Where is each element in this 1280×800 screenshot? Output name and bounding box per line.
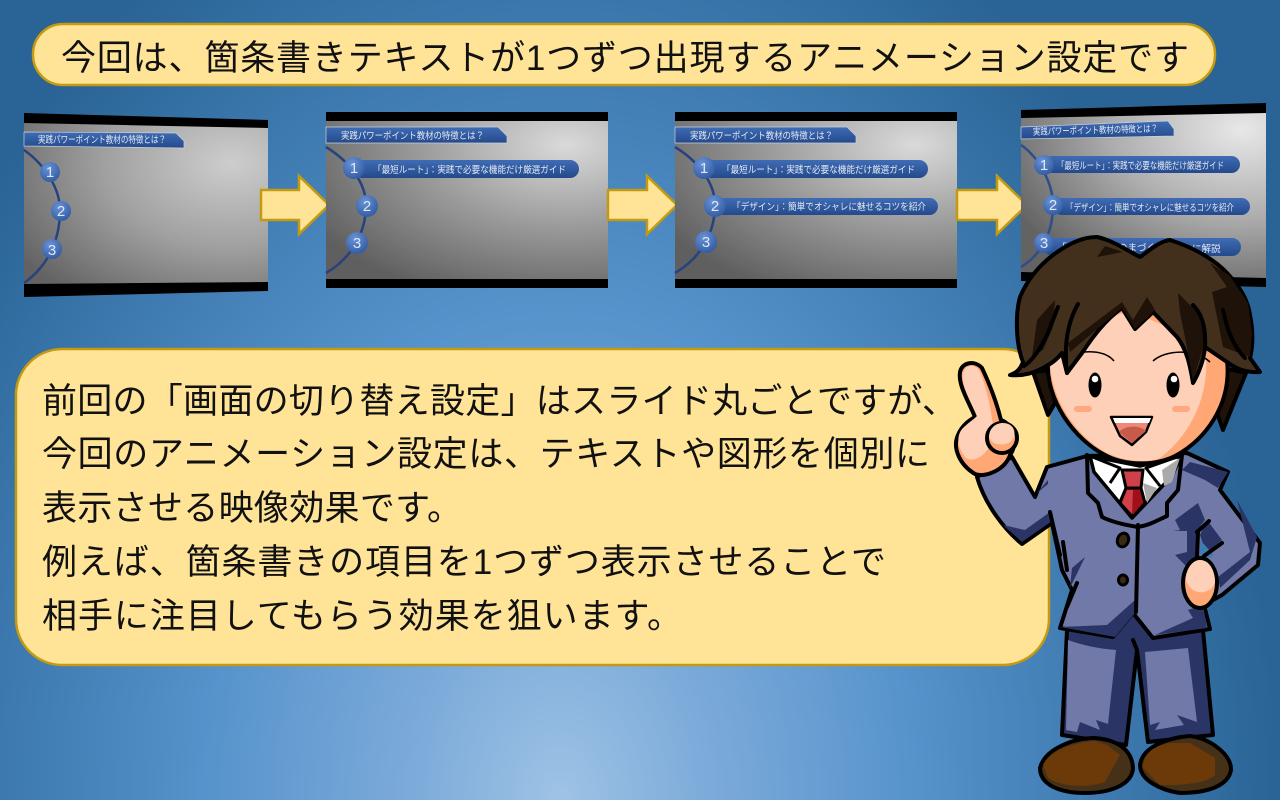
- slide 2: first bullet visible: 3: [353, 235, 361, 252]
- slide 4: three bullets visible, turning out: 「短: [1057, 242, 1076, 254]
- cheeks: [1074, 406, 1190, 412]
- slide 1: no bullets, turning in: 1: [46, 164, 54, 181]
- slide 3: two bullets visible: 3: [702, 234, 710, 251]
- slide 4: three bullets visible, turning out: 3: [1040, 235, 1048, 252]
- slide 2: first bullet visible: 「最短ルート」：実践で必要な機能だけ厳選ガイド: [373, 164, 566, 176]
- explanation text: 相手に注目してもらう効果を狙います。: [42, 597, 682, 636]
- hair: [1010, 237, 1260, 383]
- slide 2: first bullet visible: 実践パワーポイント教材の特徴とは？: [341, 130, 484, 142]
- shirt, collar and tie: [1087, 455, 1182, 527]
- slide 1: no bullets, turning in: 実践パワーポイント教材の特徴とは？: [38, 134, 166, 146]
- eyebrows: [1070, 352, 1210, 362]
- title banner: [33, 24, 1215, 85]
- left shoe: [1040, 738, 1133, 793]
- explanation text: 前回の「画面の切り替え設定」はスライド丸ごとですが、: [42, 382, 957, 421]
- hair strands: [1024, 304, 1245, 373]
- arrow 3: [957, 176, 1027, 234]
- explanation text: 表示させる映像効果です。: [42, 489, 462, 528]
- speech panel: [16, 349, 1049, 665]
- title banner: 今回は、箇条書きテキストが1つずつ出現するアニメーション設定です: [61, 39, 1189, 78]
- explanation text: 例えば、箇条書きの項目を1つずつ表示させることで: [42, 543, 886, 582]
- slide 4: three bullets visible, turning out: のまづくす: [1118, 243, 1166, 254]
- slide 2: first bullet visible: [326, 112, 608, 288]
- trousers: [1062, 605, 1213, 745]
- slide 1: no bullets, turning in: [24, 113, 268, 297]
- character: pointing businessman: [956, 237, 1260, 793]
- arrow 2: [608, 176, 677, 234]
- explanation text: [42, 382, 957, 636]
- back hair: [1033, 368, 1246, 430]
- pointing hand: [956, 363, 1017, 475]
- slide 4: three bullets visible, turning out: 「デザイン」：簡単でオシャレに魅せるコツを紹介: [1066, 202, 1234, 214]
- slide 4: three bullets visible, turning out: に解説: [1192, 243, 1221, 255]
- slide 1: no bullets, turning in: 3: [48, 242, 56, 259]
- slide 3: two bullets visible: 実践パワーポイント教材の特徴とは？: [690, 130, 833, 142]
- eyes: [1088, 372, 1180, 398]
- slide 3: two bullets visible: 「デザイン」：簡単でオシャレに魅せるコツを紹介: [732, 201, 926, 213]
- slide 4: three bullets visible, turning out: 2: [1049, 197, 1057, 214]
- slide 3: two bullets visible: 2: [711, 198, 719, 215]
- explanation text: 今回のアニメーション設定は、テキストや図形を個別に: [42, 435, 930, 474]
- slide 4: three bullets visible, turning out: 1: [1040, 157, 1048, 174]
- slide 4: three bullets visible, turning out: [1021, 103, 1266, 287]
- right shoe: [1140, 736, 1231, 793]
- slide 4: three bullets visible, turning out: 実践パワーポイント教材の特徴とは？: [1033, 123, 1158, 138]
- mouth: [1111, 417, 1152, 445]
- slide 3: two bullets visible: 1: [700, 160, 708, 177]
- hand at hip: [1183, 558, 1217, 608]
- slide 2: first bullet visible: 1: [350, 160, 358, 177]
- hair shadows: [1032, 246, 1252, 381]
- slide 1: no bullets, turning in: 2: [57, 203, 65, 220]
- slide 3: two bullets visible: 「最短ルート」：実践で必要な機能だけ厳選ガイド: [722, 164, 915, 176]
- face: [1048, 300, 1228, 463]
- jacket and arms: [977, 453, 1260, 638]
- arrow 1: [261, 176, 329, 234]
- slide 4: three bullets visible, turning out: 「最短ルート」：実践で必要な機能だけ厳選ガイド: [1057, 160, 1224, 172]
- slide 3: two bullets visible: [675, 112, 957, 288]
- slide 2: first bullet visible: 2: [363, 198, 371, 215]
